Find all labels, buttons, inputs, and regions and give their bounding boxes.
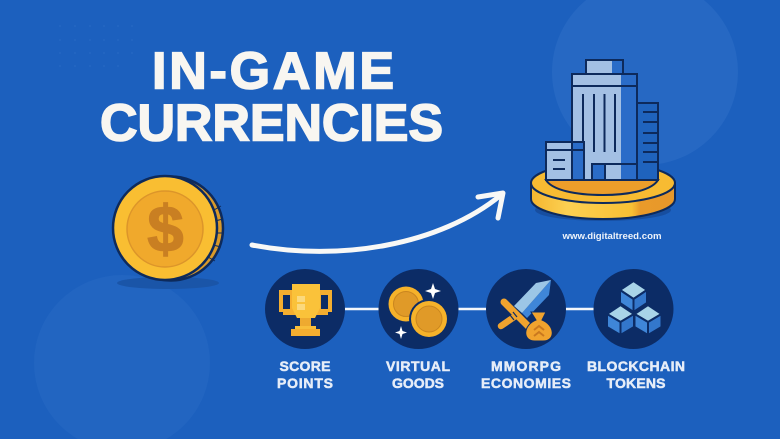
- icon: stacked cubes: [607, 281, 662, 335]
- item: virtual goods: [378, 269, 458, 391]
- icon: trophy: [279, 284, 332, 336]
- item: score points: [265, 269, 345, 391]
- icon: gold dollar coin: [113, 176, 223, 289]
- item: virtual goods: VIRTUAL: [386, 358, 450, 374]
- item: virtual goods: GOODS: [392, 375, 444, 391]
- title: [100, 42, 443, 152]
- arrow: growth curve: [252, 193, 503, 251]
- icon: buildings on gold platform: [531, 60, 675, 221]
- website url: www.digitaltreed.com: [561, 231, 662, 242]
- item: mmorpg economies: ECONOMIES: [481, 375, 571, 391]
- title: CURRENCIES: [100, 94, 443, 152]
- item: mmorpg economies: MMORPG: [491, 358, 561, 374]
- title: IN-GAME: [152, 42, 394, 100]
- item: score points: SCORE: [280, 358, 330, 374]
- item: mmorpg economies: [481, 269, 571, 391]
- icon: gold dollar coin: $: [147, 192, 184, 265]
- icon: sword and money bag: [501, 280, 552, 341]
- icon: coins with sparkles: [388, 283, 449, 339]
- item: blockchain tokens: [587, 269, 685, 391]
- item: blockchain tokens: TOKENS: [606, 375, 666, 391]
- connector line: [340, 308, 600, 310]
- item: blockchain tokens: BLOCKCHAIN: [587, 358, 685, 374]
- item: score points: POINTS: [277, 375, 333, 391]
